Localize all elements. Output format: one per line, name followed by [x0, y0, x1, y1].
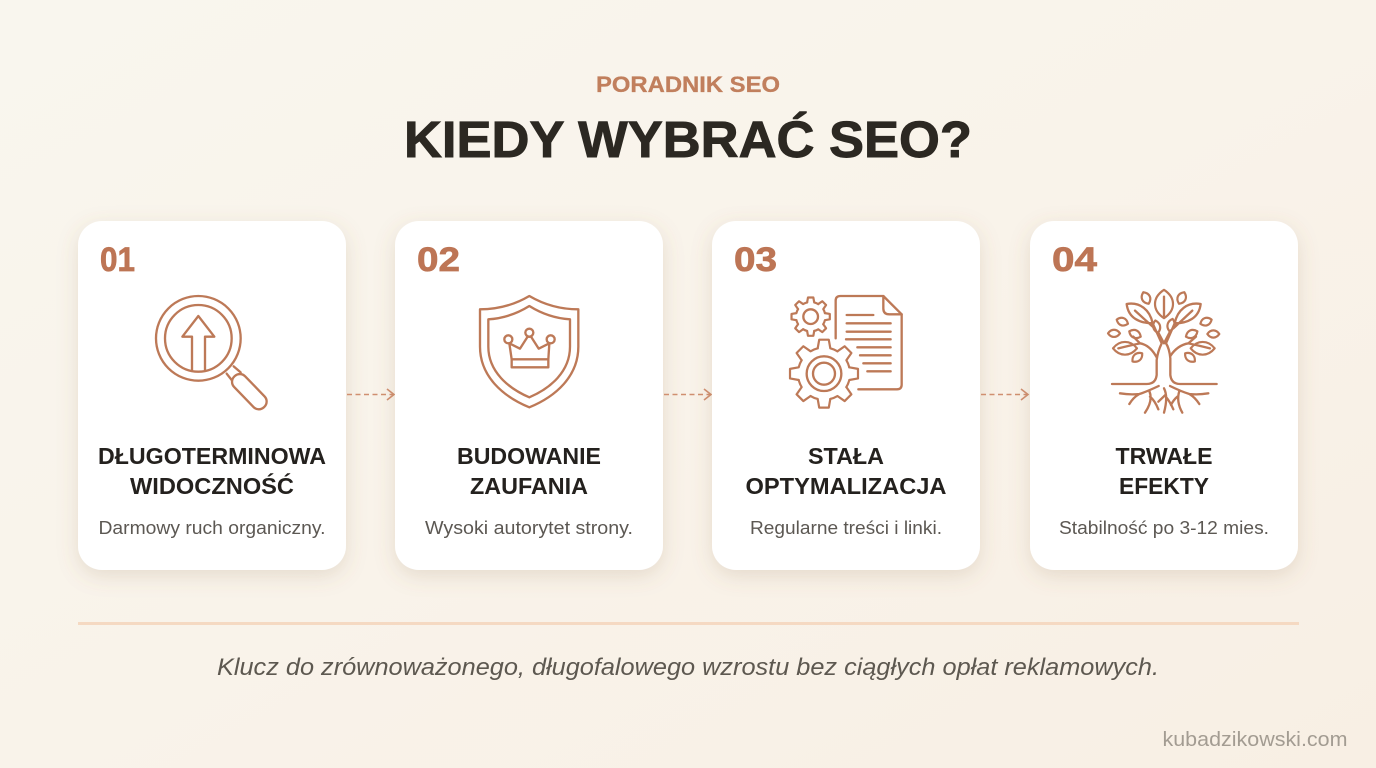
eyebrow: PORADNIK SEO: PORADNIK SEO [596, 72, 780, 97]
card 01 description: Darmowy ruch organiczny. [98, 518, 326, 538]
icon: magnifier with up arrow [154, 294, 268, 410]
panel: card 02 [395, 221, 663, 570]
card 03 description: Regularne treści i linki. [750, 518, 942, 538]
arrow 2 to 3 [664, 389, 711, 400]
panel: card 01 [78, 221, 346, 570]
card 03 number: 03 [734, 241, 777, 279]
watermark: kubadzikowski.com [1162, 729, 1348, 751]
card 01 heading line 2: WIDOCZNOŚĆ [130, 472, 294, 499]
card 01 heading: DŁUGOTERMINOWA [98, 443, 326, 469]
card 04 heading line 2: EFEKTY [1119, 473, 1209, 499]
panel: card 03 [712, 221, 980, 570]
icon: gears and document [788, 294, 903, 409]
icon: tree with roots [1106, 288, 1220, 414]
card 01 number: 01 [100, 241, 135, 279]
footer statement: Klucz do zrównoważonego, długofalowego wzrostu bez ciągłych opłat reklamowych. [217, 654, 1159, 681]
title: KIEDY WYBRAĆ SEO? [404, 111, 972, 168]
arrow 3 to 4 [981, 389, 1028, 400]
card 04 description: Stabilność po 3-12 mies. [1059, 518, 1269, 538]
card 04 number: 04 [1052, 241, 1097, 279]
icon: shield with crown [478, 294, 580, 408]
card 02 heading line 2: ZAUFANIA [470, 473, 588, 499]
card 03 heading: STAŁA [808, 443, 884, 469]
card 02 number: 02 [417, 241, 460, 279]
panel: card 04 [1030, 221, 1298, 570]
card 02 description: Wysoki autorytet strony. [425, 518, 633, 538]
card 03 heading line 2: OPTYMALIZACJA [746, 473, 946, 499]
card 04 heading: TRWAŁE [1116, 443, 1212, 469]
card 02 heading: BUDOWANIE [457, 443, 601, 469]
arrow 1 to 2 [347, 389, 394, 400]
